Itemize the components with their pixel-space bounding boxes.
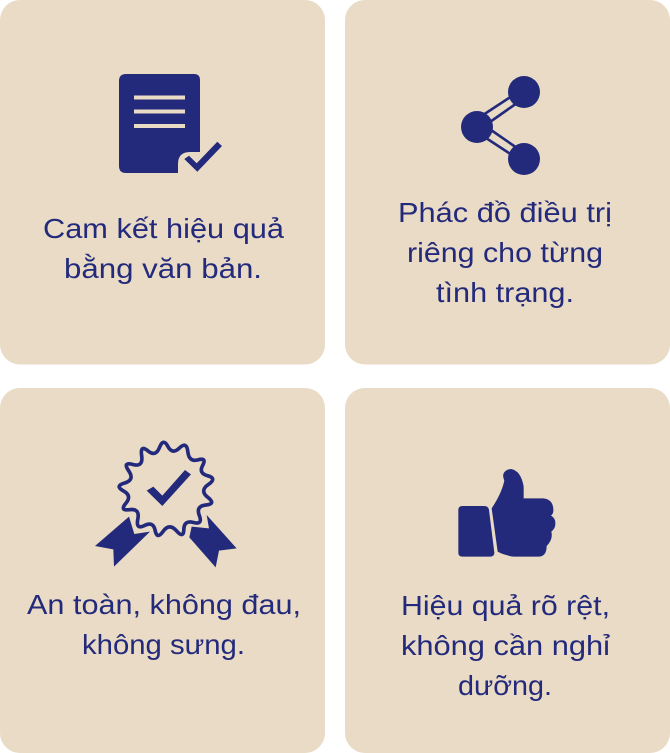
text: visible results: [401, 590, 611, 701]
text: written commitment: bằng văn bản.: [64, 253, 262, 284]
panel: personal treatment plan: [345, 0, 670, 364]
panel: safe and painless: [0, 388, 325, 753]
text: visible results: Hiệu quả rõ rệt,: [401, 590, 610, 621]
panel: visible results: [345, 388, 670, 753]
icon: document with check: [119, 74, 222, 173]
text: personal treatment plan: riêng cho từng: [407, 237, 603, 268]
text: personal treatment plan: tình trạng.: [436, 277, 574, 308]
text: personal treatment plan: [398, 197, 612, 308]
text: written commitment: [43, 213, 284, 284]
text: visible results: dưỡng.: [458, 670, 552, 701]
icon: thumbs up: [458, 469, 555, 557]
icon: award rosette: [95, 442, 237, 567]
text: visible results: không cần nghỉ: [401, 630, 611, 661]
text: safe and painless: An toàn, không đau,: [27, 589, 301, 620]
text: personal treatment plan: Phác đồ điều trị: [398, 197, 612, 228]
text: safe and painless: không sưng.: [82, 629, 245, 660]
text: written commitment: Cam kết hiệu quả: [43, 213, 284, 244]
panel: written commitment: [0, 0, 325, 364]
text: safe and painless: [27, 589, 301, 660]
icon: share network: [461, 76, 540, 175]
